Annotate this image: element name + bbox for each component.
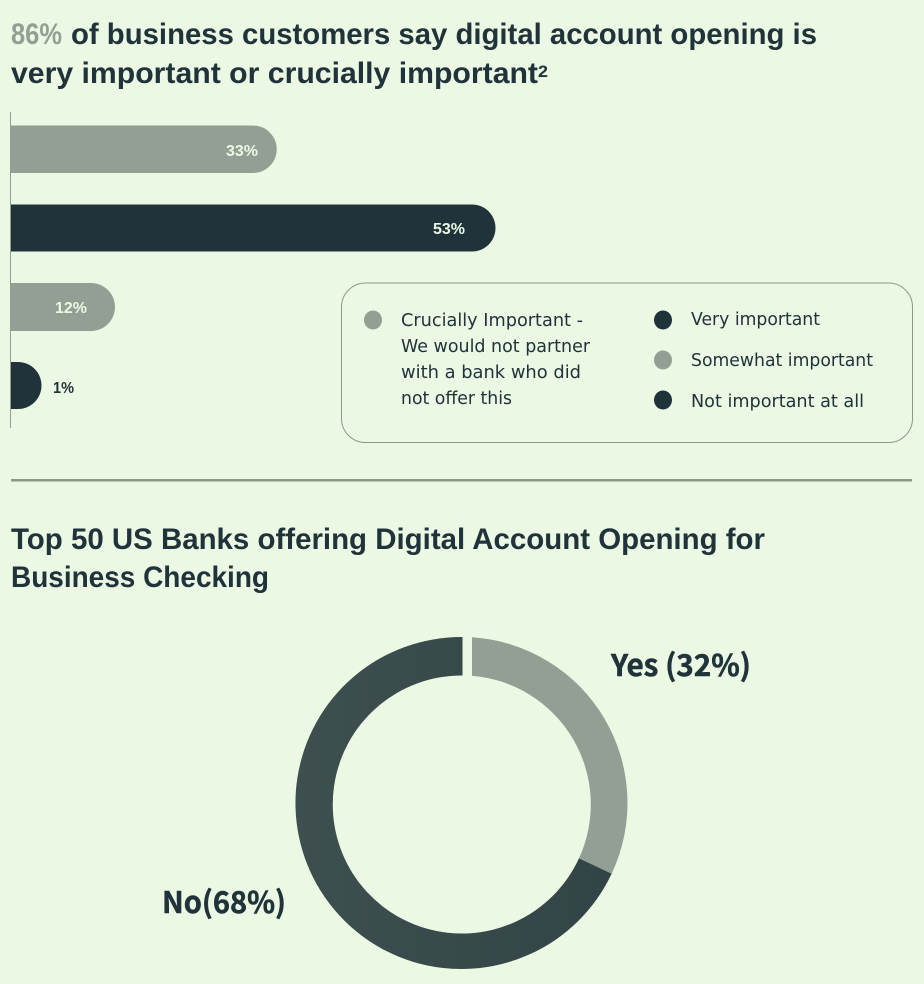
title: digital account opening importance: of business customers say digital account opening is: [71, 18, 817, 51]
legend item: somewhat important: Somewhat important: [691, 350, 873, 371]
bar: 1% not important at all: [11, 362, 74, 409]
title: digital account opening importance: 2: [538, 62, 548, 81]
legend item: crucially important: Crucially Important -: [401, 310, 583, 331]
legend item: crucially important: We would not partner: [401, 336, 591, 357]
bar: 53% very important: 53%: [433, 221, 465, 238]
legend item: crucially important: [364, 310, 591, 409]
title: digital account opening importance: very important or crucially important: [11, 57, 538, 90]
label: no 68%: No(68%): [162, 878, 286, 922]
bar chart: importance of digital account opening: [10, 112, 496, 428]
bar: 53% very important: [11, 204, 496, 252]
donut segment: yes 32%: [472, 637, 627, 874]
heading: top 50 US banks: Top 50 US Banks offering Digital Account Opening for: [11, 523, 765, 556]
legend panel: [342, 283, 912, 442]
legend item: crucially important: not offer this: [401, 388, 512, 409]
legend item: crucially important: with a bank who did: [401, 362, 581, 383]
bar: 12% somewhat important: [11, 283, 115, 331]
label: yes 32%: Yes (32%): [610, 641, 751, 685]
bar: 1% not important at all: 1%: [53, 380, 74, 397]
legend item: not important at all: Not important at all: [691, 391, 864, 412]
bar: 33% crucially important: [11, 126, 277, 173]
legend item: very important: Very important: [691, 309, 820, 330]
title: digital account opening importance: [11, 18, 817, 90]
bar: 33% crucially important: 33%: [226, 143, 258, 160]
bar: 12% somewhat important: 12%: [55, 300, 87, 317]
heading: top 50 US banks: [11, 523, 765, 594]
title: digital account opening importance: 86%: [11, 18, 62, 51]
heading: top 50 US banks: Business Checking: [11, 561, 269, 594]
donut segment: no 68%: [295, 637, 612, 969]
donut chart: banks offering digital account opening: [162, 637, 751, 969]
